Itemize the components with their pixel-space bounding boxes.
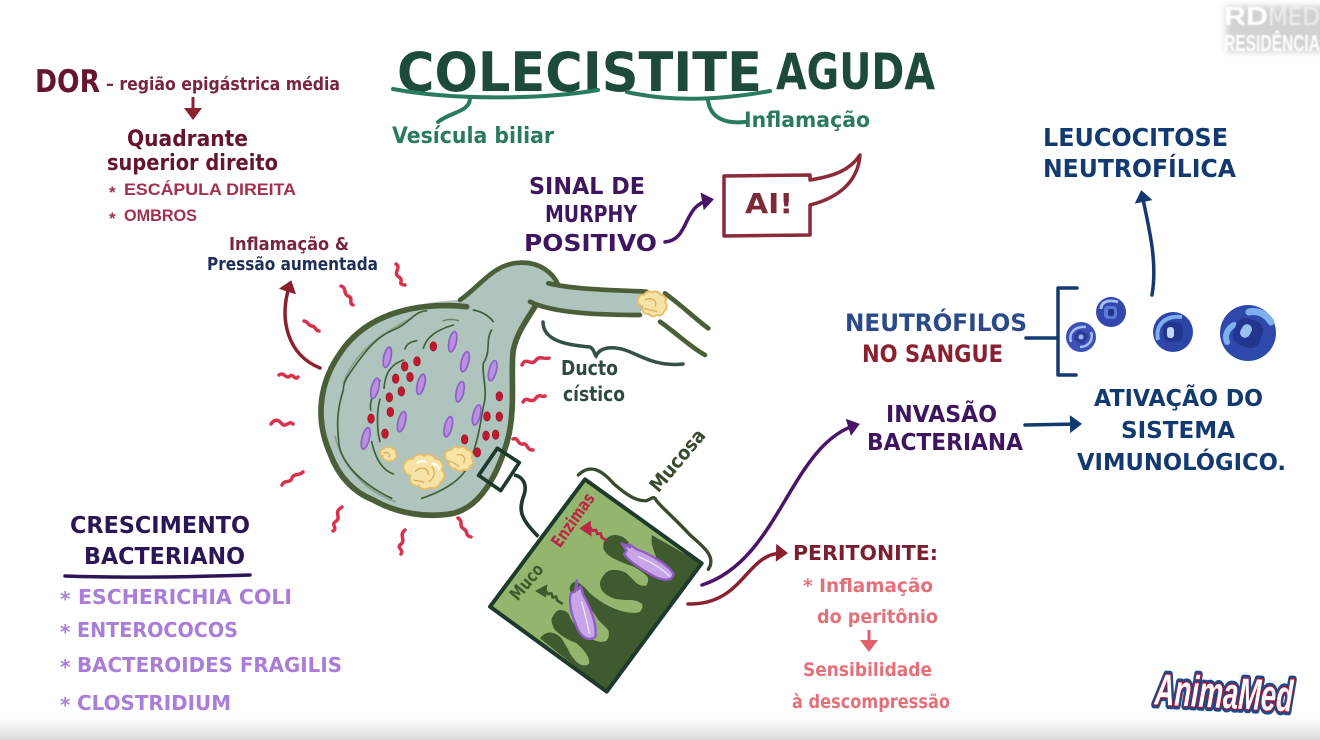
cystic duct label and brace: cístico [563, 382, 625, 406]
inflammation and pressure label with arrow: Inflamação & [229, 234, 349, 255]
gallbladder diagram [321, 263, 708, 515]
peritonitis block [792, 541, 950, 713]
pain block: superior direito [107, 151, 278, 176]
arrow: mucosa to peritonitis [688, 553, 784, 604]
pain block: DOR [35, 64, 100, 100]
watermark: RD Med Residência: RD [1224, 1, 1268, 31]
arrow: mucosa to bacterial invasion [702, 425, 856, 585]
Murphy sign: SINAL DE [529, 174, 645, 200]
bacteria list [60, 585, 342, 717]
bacteria list: ENTEROCOCOS [77, 618, 238, 642]
neutrophils in blood label and bracket [845, 288, 1077, 375]
bacterial invasion label: INVASÃO [886, 400, 997, 428]
cystic duct label and brace [543, 322, 683, 406]
speech bubble: AI! [724, 155, 860, 236]
watermark: RD Med Residência [1224, 1, 1320, 56]
leukocytosis label: LEUCOCITOSE [1043, 123, 1228, 152]
immune activation label: VIMUNOLÓGICO. [1077, 448, 1286, 476]
peritonitis block: PERITONITE: [793, 541, 938, 565]
zoom detail: mucosa square [479, 424, 711, 692]
peritonitis block: do peritônio [817, 606, 938, 628]
Murphy sign: POSITIVO [524, 231, 657, 257]
Murphy sign: MURPHY [545, 202, 637, 228]
pain block: OMBROS [124, 206, 197, 225]
inflammation wiggles [271, 264, 549, 554]
neutrophils in blood label and bracket: NO SANGUE [862, 340, 1003, 368]
bacterial growth heading: BACTERIANO [84, 544, 245, 570]
title etymology: vesícula biliar [392, 89, 598, 149]
bacteria in the lumen [359, 331, 499, 450]
arrow: neutrophils to leukocytosis [1142, 194, 1154, 295]
immune activation label [1077, 384, 1286, 476]
speech bubble: AI!: AI! [745, 187, 793, 220]
mucosa bacteria [570, 543, 673, 639]
pain block: * [109, 183, 116, 202]
bacterial invasion label: BACTERIANA [867, 430, 1023, 456]
arrow: invasion to immune activation [1025, 424, 1078, 425]
pain block: Quadrante [127, 127, 248, 152]
red blood cells [368, 342, 503, 457]
label: muco: Muco [506, 560, 548, 605]
bacterial invasion label [867, 400, 1023, 456]
bacterial growth heading: CRESCIMENTO [70, 513, 250, 539]
bacteria list: ESCHERICHIA COLI [78, 585, 292, 609]
neutrophils in blood label and bracket: NEUTRÓFILOS [845, 307, 1027, 337]
title: COLECISTITE [397, 41, 762, 104]
title etymology: inflamação [627, 91, 870, 132]
pain block: – região epigástrica média [106, 74, 340, 95]
bacteria list: * [60, 693, 71, 717]
gallstones [380, 292, 667, 489]
label: enzimas: Enzimas [548, 490, 599, 552]
title etymology: vesícula biliar: Vesícula biliar [392, 124, 554, 149]
peritonitis block: Sensibilidade [803, 659, 932, 681]
pain block: ESCÁPULA DIREITA [124, 180, 296, 199]
bacterial growth heading [65, 513, 250, 577]
bacteria list: CLOSTRIDIUM [77, 691, 231, 715]
pain block [35, 64, 340, 228]
inflammation and pressure label with arrow: Pressão aumentada [207, 254, 378, 275]
leukocytosis label: NEUTROFÍLICA [1043, 154, 1237, 183]
label: mucosa with brace [578, 424, 711, 569]
immune activation label: SISTEMA [1121, 418, 1235, 444]
inflammation and pressure label with arrow [207, 234, 378, 368]
neutrophil cells [1066, 297, 1276, 361]
cystic duct label and brace: Ducto [561, 356, 618, 380]
peritonitis block: * Inflamação [803, 575, 933, 597]
title: AGUDA [776, 43, 935, 101]
gallbladder body and cystic duct [321, 263, 708, 515]
Murphy sign [524, 174, 710, 257]
immune activation label: ATIVAÇÃO DO [1094, 384, 1263, 412]
mucosa tissue [490, 479, 702, 692]
leukocytosis label [1043, 123, 1237, 183]
peritonitis block: à descompressão [792, 691, 950, 713]
mucosa folds [335, 310, 493, 502]
magnifier box and connector [479, 448, 538, 537]
bacteria list: * [60, 620, 71, 644]
bacteria list: * [60, 587, 71, 611]
title etymology: inflamação: Inflamação [744, 108, 870, 132]
pain block: * [109, 209, 116, 228]
label: mucosa with brace: Mucosa [645, 424, 710, 497]
bacteria list: BACTEROIDES FRAGILIS [77, 653, 342, 677]
bacteria list: * [60, 655, 71, 679]
